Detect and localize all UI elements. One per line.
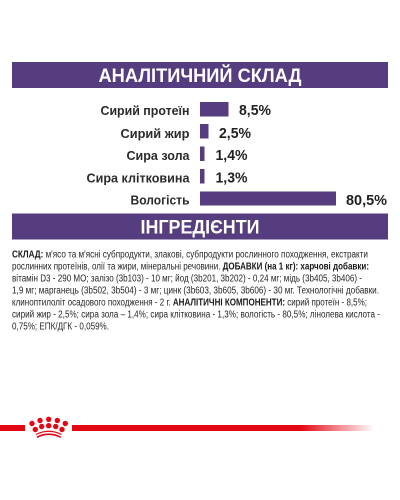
row: crude fat	[120, 124, 251, 142]
row: crude fibre: 1,3%	[216, 170, 248, 186]
text block: ingredients composition: клиноптилоліт осадового походження - 2 г. АНАЛІТИЧНІ КОМПОНЕНТИ: сирий протеїн - 8,5%;	[12, 298, 367, 308]
bar chart: analytical composition	[86, 102, 387, 209]
heading banner: analytical composition	[12, 62, 388, 88]
row: crude fat: Сирий жир	[120, 126, 190, 141]
row: moisture	[130, 192, 387, 209]
heading banner: analytical composition: АНАЛІТИЧНИЙ СКЛАД	[98, 65, 302, 87]
row: crude protein	[100, 102, 271, 119]
row: crude protein: 8,5%	[239, 103, 271, 119]
row: crude fibre: Сира клітковина	[86, 170, 190, 186]
footer red line: right segment fading out	[72, 425, 374, 431]
text block: ingredients composition: 0,75%; ЕПК/ДГК - 0,059%.	[12, 322, 109, 332]
icon: royal crown logo	[29, 417, 68, 437]
row: crude protein: Сирий протеїн	[100, 103, 190, 118]
row: crude ash: Сира зола	[126, 148, 190, 163]
footer red line: left segment	[0, 425, 25, 431]
heading banner: ingredients: ІНГРЕДІЄНТИ	[140, 218, 260, 238]
text block: ingredients composition	[12, 248, 380, 332]
row: crude ash: 1,4%	[216, 148, 248, 164]
heading banner: ingredients	[12, 214, 388, 240]
row: crude ash	[126, 146, 248, 164]
row: moisture: Вологість	[130, 192, 190, 208]
row: moisture: 80,5%	[346, 193, 387, 209]
row: crude fat: 2,5%	[219, 126, 251, 142]
text block: ingredients composition: рослинних протеїнів, олії та жири, мінеральні речовини. ДОБАВКИ (на 1 кг): харчові добавки:	[12, 260, 369, 272]
row: crude fibre	[86, 169, 248, 186]
